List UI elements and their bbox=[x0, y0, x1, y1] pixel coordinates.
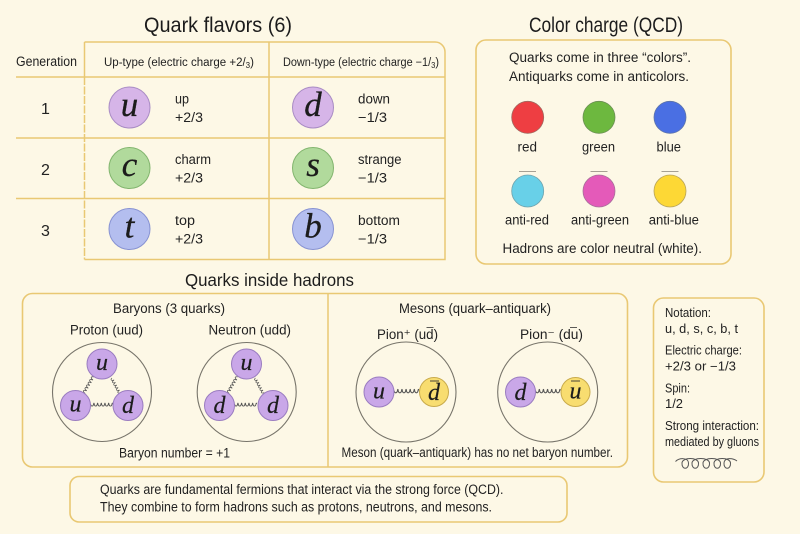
diagram: proton bbox=[52, 342, 152, 442]
note: color neutral: Hadrons are color neutral (white). bbox=[502, 241, 702, 256]
diagram: pion plus: d bbox=[428, 380, 441, 406]
notation: Notation: bbox=[665, 306, 711, 320]
note: baryon number: Baryon number = +1 bbox=[119, 446, 230, 460]
diagram: proton: u bbox=[70, 392, 82, 418]
electric charge bbox=[665, 344, 742, 374]
column header: up-type: 3 bbox=[246, 61, 251, 70]
icon: gluon coil bbox=[676, 458, 737, 468]
color: anti-red bbox=[505, 172, 549, 228]
color: anti-blue: anti-blue bbox=[649, 212, 699, 228]
color: red: red bbox=[518, 140, 537, 154]
notation bbox=[665, 306, 739, 336]
panel: summary bbox=[70, 476, 567, 522]
quark: bottom bbox=[292, 206, 400, 250]
quark: up: +2/3 bbox=[175, 110, 203, 125]
quark: top: t bbox=[125, 206, 136, 246]
title: quarks inside hadrons: Quarks inside hadrons bbox=[185, 270, 354, 290]
column header: down-type: Down-type (electric charge −1/ bbox=[283, 57, 439, 69]
panel: quarks inside hadrons bbox=[22, 294, 628, 467]
intro text: Antiquarks come in anticolors. bbox=[509, 69, 689, 84]
strong interaction: Strong interaction: bbox=[665, 419, 759, 433]
generation numbers: 1 bbox=[41, 101, 50, 118]
color: green bbox=[582, 101, 615, 154]
color: green: green bbox=[582, 140, 615, 154]
color: anti-green: anti-green bbox=[571, 212, 629, 228]
quark: down: d bbox=[304, 85, 322, 124]
diagram: pion minus: u bbox=[570, 378, 582, 404]
spin bbox=[665, 382, 690, 411]
quark: bottom: bottom bbox=[358, 213, 400, 228]
color: anti-green bbox=[571, 172, 629, 228]
strong interaction: mediated by gluons bbox=[665, 435, 759, 449]
diagram: pion minus bbox=[498, 342, 598, 442]
generation numbers bbox=[41, 101, 50, 240]
quark: bottom: b bbox=[304, 206, 322, 246]
quark: up: u bbox=[121, 85, 138, 124]
spin: Spin: bbox=[665, 382, 690, 396]
intro text: Quarks come in three “colors”. bbox=[509, 50, 691, 65]
note: meson baryon number: Meson (quark–antiquark) has no net baryon number. bbox=[342, 445, 613, 460]
color: blue bbox=[654, 101, 686, 154]
panel: color charge bbox=[476, 40, 731, 264]
spin: 1/2 bbox=[665, 397, 683, 411]
diagram: neutron: u bbox=[240, 350, 252, 376]
quark: bottom: −1/3 bbox=[358, 232, 387, 246]
label: neutron: Neutron (udd) bbox=[208, 322, 291, 338]
quark: down: −1/3 bbox=[358, 110, 387, 125]
table grid bbox=[16, 42, 445, 260]
quark: top: +2/3 bbox=[175, 232, 203, 246]
title: quark flavors: Quark flavors (6) bbox=[144, 14, 292, 37]
quark: strange: −1/3 bbox=[358, 170, 387, 186]
intro text bbox=[509, 50, 691, 84]
title: color charge: Color charge (QCD) bbox=[529, 14, 683, 37]
panel: summary: They combine to form hadrons such as protons, neutrons, and mesons. bbox=[100, 500, 492, 514]
color: blue: blue bbox=[656, 140, 681, 154]
color: red bbox=[512, 101, 544, 154]
diagram: proton: d bbox=[122, 393, 135, 419]
column header: down-type: ) bbox=[435, 57, 439, 69]
quark: charm: c bbox=[122, 145, 138, 184]
label: proton: Proton (uud) bbox=[70, 322, 143, 338]
strong interaction bbox=[665, 419, 759, 449]
quark: down bbox=[292, 85, 390, 128]
diagram: pion plus bbox=[356, 342, 456, 442]
panel: summary: Quarks are fundamental fermions that interact via the strong force (QCD). bbox=[100, 482, 504, 497]
diagram: neutron: d bbox=[214, 393, 226, 419]
quark: top: top bbox=[175, 213, 195, 228]
diagram: pion plus: u bbox=[373, 378, 385, 404]
electric charge: +2/3 or −1/3 bbox=[665, 360, 736, 374]
quark: strange: s bbox=[306, 145, 320, 184]
quark: charm: +2/3 bbox=[175, 170, 203, 186]
column header: up-type: ) bbox=[250, 57, 254, 69]
generation numbers: 3 bbox=[41, 223, 50, 240]
heading: baryons: Baryons (3 quarks) bbox=[113, 301, 225, 316]
color: anti-blue bbox=[649, 172, 699, 228]
panel: notation sidebar bbox=[654, 298, 764, 482]
quark: strange bbox=[292, 145, 402, 188]
diagram: neutron bbox=[197, 342, 296, 442]
quark: top bbox=[109, 206, 203, 250]
quark: charm: charm bbox=[175, 152, 211, 167]
column header: down-type: 3 bbox=[431, 61, 436, 70]
notation: u, d, s, c, b, t bbox=[665, 322, 739, 336]
electric charge: Electric charge: bbox=[665, 344, 742, 358]
column header: up-type: Up-type (electric charge +2/ bbox=[104, 57, 246, 69]
panel: quark flavors table bbox=[16, 42, 445, 260]
diagram: neutron: d bbox=[267, 393, 280, 419]
quark: down: down bbox=[358, 92, 390, 106]
heading: mesons: Mesons (quark–antiquark) bbox=[399, 301, 551, 316]
diagram: proton: u bbox=[96, 350, 108, 376]
diagram: pion minus: d bbox=[514, 380, 528, 406]
quark: strange: strange bbox=[358, 152, 402, 167]
quark: up: up bbox=[175, 92, 189, 106]
color: anti-red: anti-red bbox=[505, 212, 549, 228]
generation numbers: 2 bbox=[41, 162, 50, 179]
quark: charm bbox=[109, 145, 211, 188]
label: pion minus: Pion⁻ (du) bbox=[520, 327, 583, 342]
label: pion plus: Pion⁺ (ud) bbox=[377, 327, 438, 342]
quark: up bbox=[109, 85, 203, 128]
column header: generation: Generation bbox=[16, 54, 77, 69]
